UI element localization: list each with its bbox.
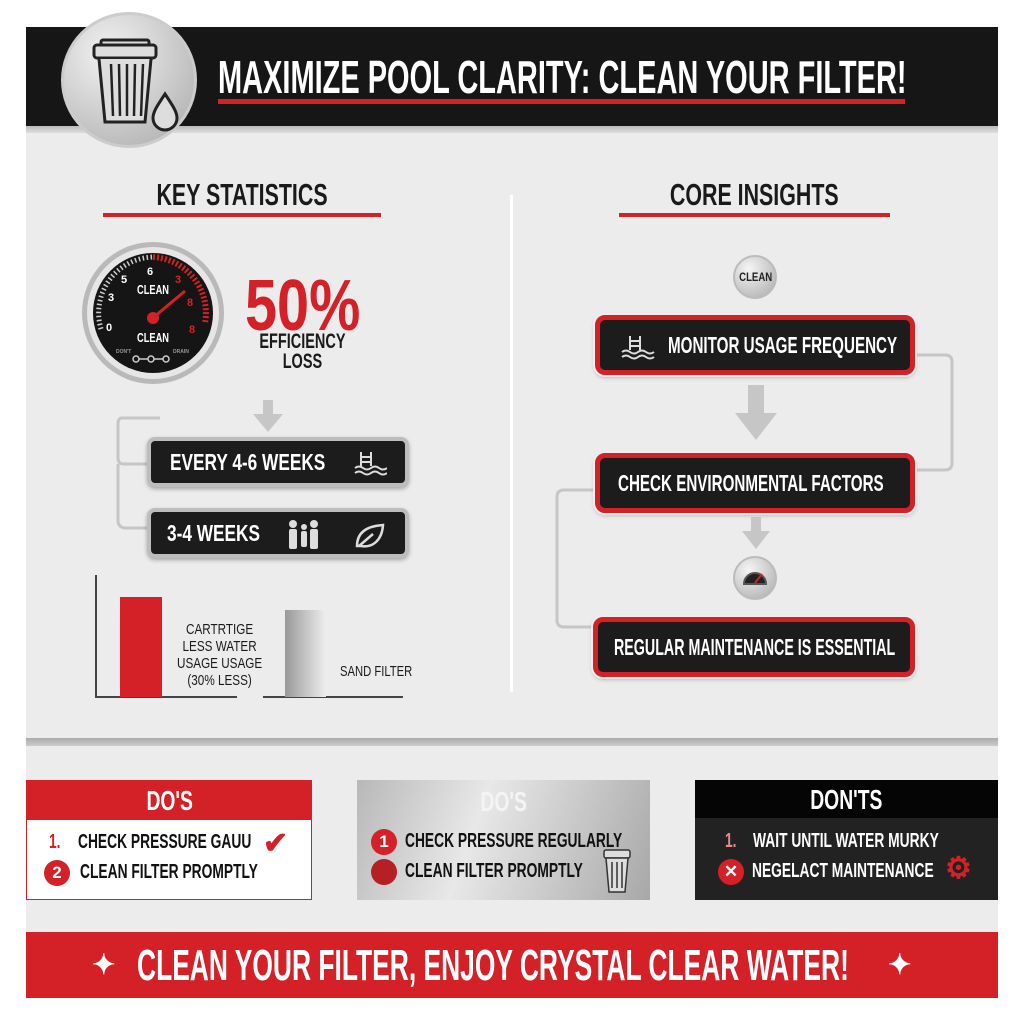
gauge [82, 242, 224, 384]
panel: do's silver: 1 [379, 832, 389, 851]
panel: don'ts: ✕ [724, 862, 738, 881]
stat: 50%: 50% [245, 266, 360, 346]
bar: cartridge [120, 597, 162, 697]
bar chart: (30% LESS) [187, 672, 252, 689]
panel: do's silver [357, 780, 650, 900]
panel: do's red: CHECK PRESSURE GAUU [78, 831, 251, 853]
panel: do's red: DO'S [146, 785, 193, 816]
arrow down [253, 400, 283, 432]
panel: do's silver: DO'S [480, 786, 527, 817]
gauge: 8 [189, 324, 195, 336]
box: monitor usage: MONITOR USAGE FREQUENCY [668, 332, 897, 358]
arrow down [742, 517, 770, 549]
panel: don'ts: DON'TS [810, 784, 883, 815]
panel: do's red [26, 780, 312, 900]
panel: do's red: 2 [52, 863, 62, 882]
panel: do's red: 1. [49, 831, 61, 853]
gauge: 0 [106, 322, 112, 334]
bar chart [95, 575, 412, 698]
gauge: 3 [175, 274, 181, 286]
gauge: 5 [121, 274, 127, 286]
title: MAXIMIZE POOL CLARITY: CLEAN YOUR FILTER! [218, 51, 907, 103]
pill: 3-4 weeks: 3-4 WEEKS [167, 520, 260, 546]
gauge: CLEAN [137, 282, 169, 297]
bar chart: CARTRTIGE [186, 621, 253, 638]
gauge: CLEAN [137, 330, 169, 345]
header band [26, 27, 998, 126]
pill: every 4-6 weeks: EVERY 4-6 WEEKS [170, 448, 325, 474]
gauge: DON'T [116, 349, 131, 355]
box: check environmental [595, 453, 915, 513]
icon: clean badge [733, 255, 777, 299]
title underline [218, 99, 905, 104]
header gray strip [26, 126, 998, 133]
footer banner [26, 932, 998, 998]
panel: don'ts: WAIT UNTIL WATER MURKY [753, 830, 939, 852]
panel: do's red: ✔ [263, 827, 288, 860]
stat label: EFFICIENCY [259, 330, 345, 353]
gauge: 8 [187, 297, 193, 309]
bar chart: SAND FILTER [340, 663, 412, 680]
icon: clean badge: CLEAN [739, 270, 772, 284]
panel: don'ts [695, 780, 998, 900]
icon: trash can with drop [61, 12, 197, 148]
stat label: LOSS [283, 350, 322, 373]
bar chart: USAGE USAGE [177, 655, 262, 672]
box: monitor usage [595, 315, 915, 375]
connectors right [556, 354, 954, 628]
footer banner: ✦ [888, 949, 911, 980]
panel: don'ts: NEGELACT MAINTENANCE [752, 860, 934, 882]
panel: do's red: CLEAN FILTER PROMPTLY [80, 861, 258, 883]
pill: 3-4 weeks [147, 508, 409, 558]
bar: sand filter [285, 610, 326, 697]
panel: do's silver: CLEAN FILTER PROMPTLY [405, 860, 583, 882]
arrow down [735, 385, 777, 440]
gauge: DRAIN [173, 349, 189, 355]
box: regular maintenance: REGULAR MAINTENANCE IS ESSENTIAL [614, 634, 895, 660]
box: check environmental: CHECK ENVIRONMENTAL FACTORS [618, 470, 884, 496]
gauge: 6 [147, 266, 153, 278]
gauge: 3 [108, 292, 114, 304]
box: regular maintenance [593, 617, 915, 677]
heading: core insights: CORE INSIGHTS [670, 177, 839, 212]
pill: every 4-6 weeks [147, 437, 409, 487]
footer banner: ✦ [92, 949, 115, 980]
heading: key statistics: KEY STATISTICS [156, 177, 328, 212]
icon: gauge badge [733, 556, 777, 600]
connector lines left [116, 416, 160, 530]
bar chart: LESS WATER [183, 638, 257, 655]
separator [26, 738, 998, 746]
panel: do's silver: CHECK PRESSURE REGULARLY [405, 830, 622, 852]
stat label [259, 330, 346, 373]
footer banner: CLEAN YOUR FILTER, ENJOY CRYSTAL CLEAR WATER! [137, 941, 849, 990]
divider [510, 195, 513, 692]
panel: don'ts: ⚙ [945, 852, 972, 885]
panel: don'ts: 1. [725, 830, 737, 852]
